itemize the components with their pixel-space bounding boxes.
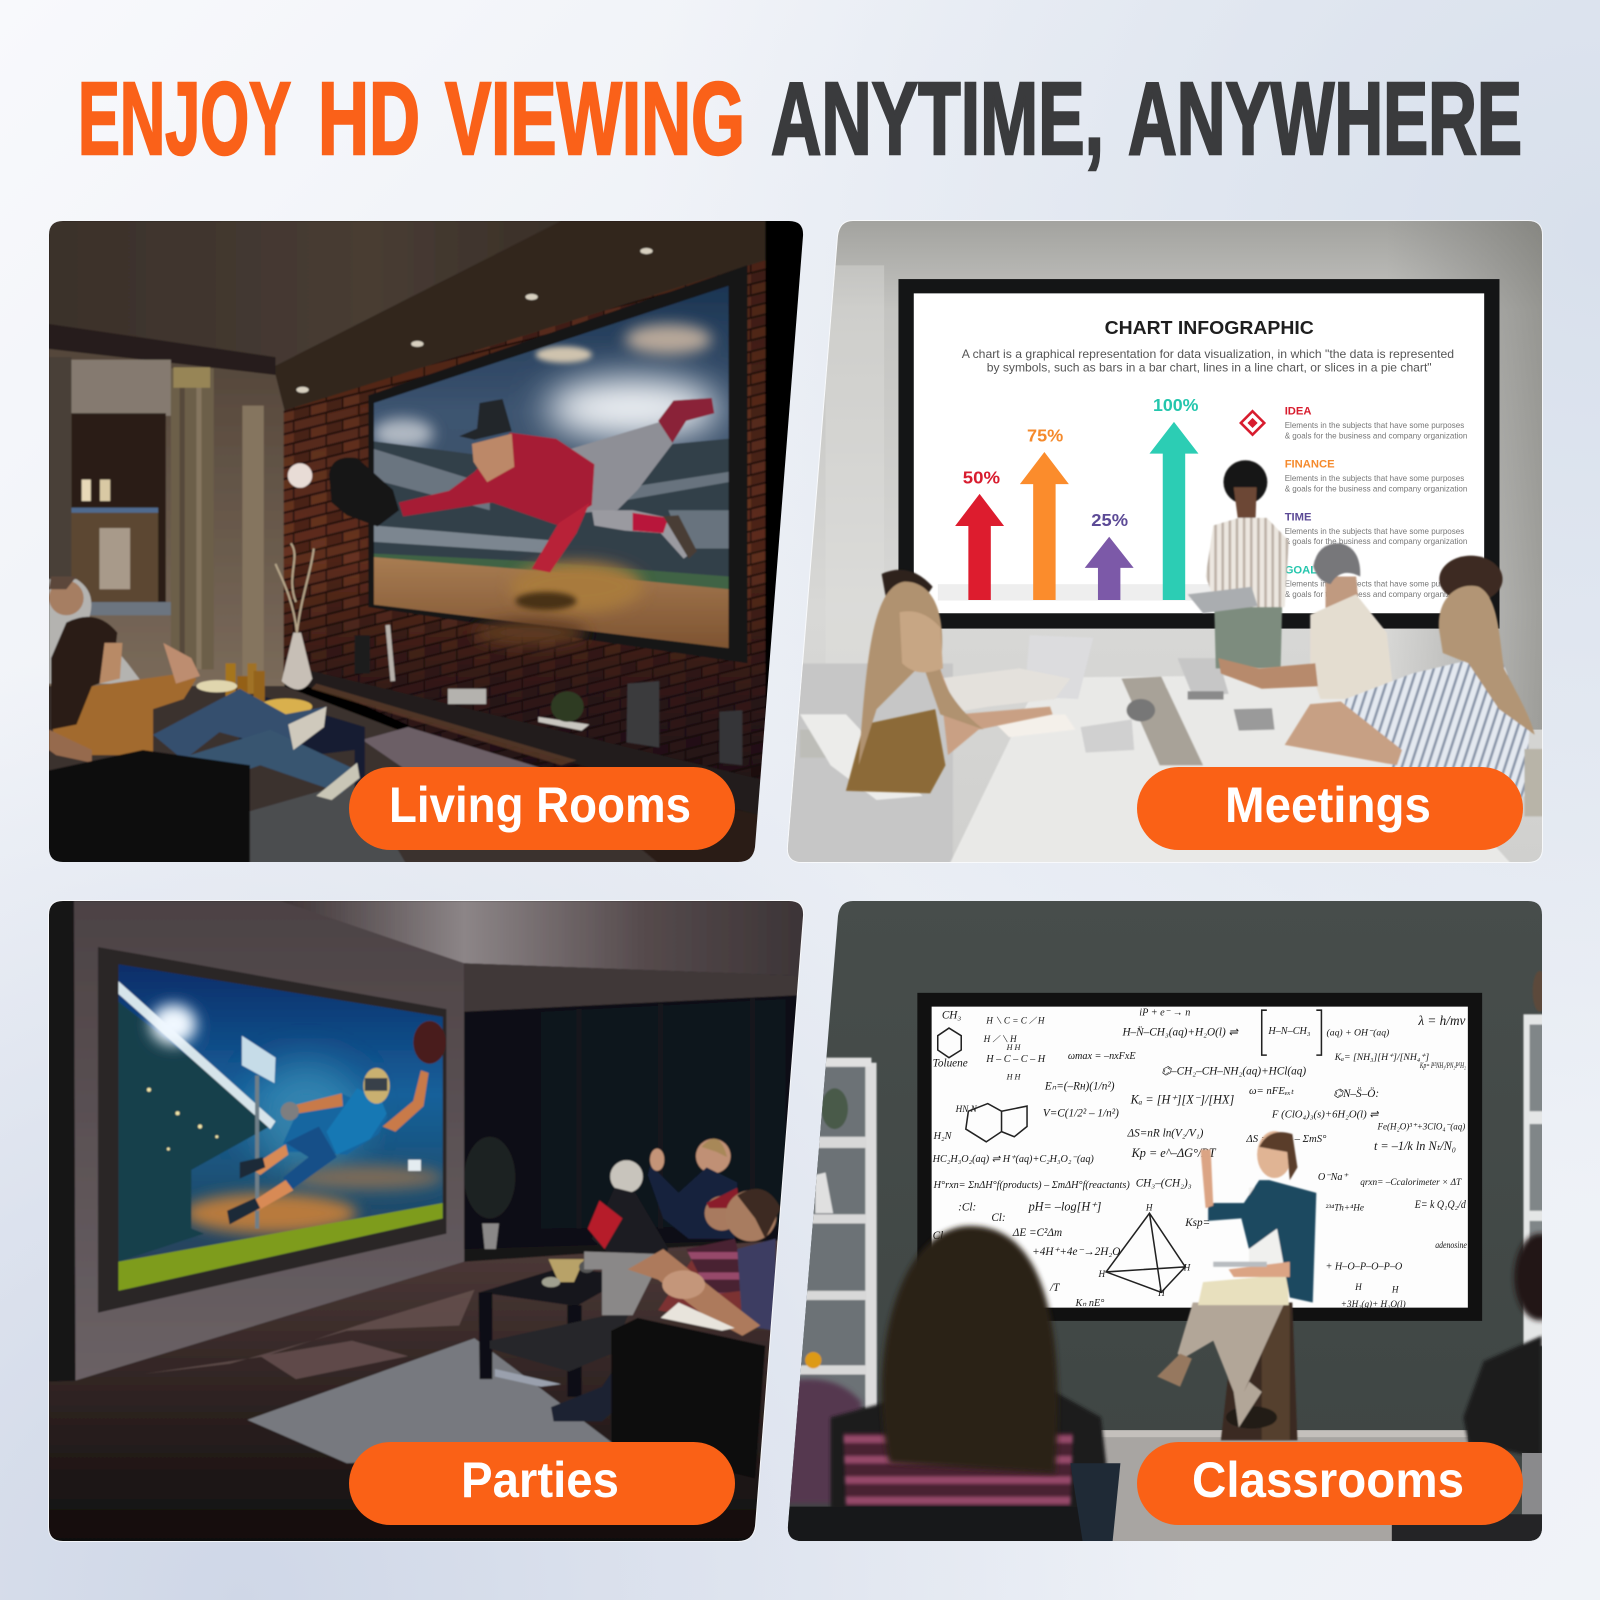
chart legend: & goals for the business and company organization [1285,483,1468,493]
chemistry formulas: H [1183,1262,1192,1272]
chemistry formulas: Toluene [933,1057,968,1069]
bookshelves [785,971,1547,1410]
chemistry formulas: Kₐ= [NH₃][H⁺]/[NH₄⁺] [1334,1052,1429,1063]
chart legend: Elements in the subjects that have some purposes [1285,473,1465,483]
title: VIEWING [445,61,745,176]
chemistry formulas: E= k Q₁Q₂/d [1414,1199,1466,1211]
chart legend: IDEA [1285,405,1312,417]
attendee: left woman [846,570,1070,793]
chemistry formulas: λ = h/mv [1417,1013,1466,1028]
projection screen [98,947,446,1313]
chemistry formulas: CH₃ [942,1009,961,1021]
chart legend: & goals for the business and company organization [1285,430,1468,440]
title [78,61,1522,176]
presentation screen [898,279,1499,629]
chart legend: TIME [1285,511,1312,523]
chemistry formulas: ⌬–CH₂–CH–NH₂(aq)+HCl(aq) [1161,1065,1306,1077]
screen frame and whiteboard [917,993,1482,1321]
chemistry formulas: Cl: [991,1212,1006,1224]
chemistry formulas: H [1157,1288,1166,1298]
chemistry formulas: HC₂H₃O₂(aq) ⇌ H⁺(aq)+C₂H₃O₂⁻(aq) [932,1154,1094,1165]
chemistry formulas: ΔE =C²Δm [1012,1227,1062,1239]
teacher on stool [1157,1131,1316,1440]
chemistry formulas: H°rxn= ΣnΔH°f(products) – ΣmΔH°f(reactants) [933,1180,1130,1191]
wood floor and rug [49,1239,806,1545]
chemistry formulas: Eₙ=(–Rн)(1/n²) [1044,1080,1115,1092]
chemistry formulas: H [1354,1282,1363,1292]
chemistry formulas: H–N–CH₃ [1267,1026,1311,1037]
title: HD [318,61,420,176]
chemistry formulas: Fe(H₂O)³⁺+3ClO₄⁻(aq) [1377,1122,1465,1133]
sofa [49,750,250,867]
chemistry formulas: Cl [933,1230,943,1242]
coffee table [479,1259,633,1397]
recessed lights [296,248,653,393]
chart legend: Elements in the subjects that have some purposes [1285,420,1465,430]
label: Living Rooms: Living Rooms [389,777,691,833]
football player [227,1021,446,1224]
chemistry formulas: ΔS=nR ln(V₂/V₁) [1127,1128,1204,1140]
chemistry formulas: + H–O–P–O–P–O [1326,1261,1403,1272]
audience [785,1226,1565,1545]
vase with branches [276,543,314,689]
chart legend [1285,405,1468,599]
chemistry formulas: H–N̈–CH₃(aq)+H₂O(l) ⇌ [1121,1027,1239,1039]
chemistry formulas: iP + e⁻ → n [1139,1007,1190,1018]
chemistry formulas: pH= –log[H⁺] [1028,1200,1102,1214]
chemistry formulas: Kp= P²NH₃/PN₂P³H₂ [1419,1060,1466,1070]
label: Classrooms [1137,1442,1523,1525]
chart legend: & goals for the business and company organization [1285,536,1468,546]
panel: meetings [785,219,1550,867]
brick wall [284,260,765,862]
panel: living rooms [46,219,811,867]
chart legend: & goals for the business and company organization [1285,589,1468,599]
dust cloud [474,561,643,645]
title: ANYTIME, [771,61,1104,176]
chemistry formulas: :Cl: [958,1202,976,1214]
chemistry formulas: Kp = e^–ΔG°/RT [1131,1146,1217,1160]
chemistry formulas: t = –1/k ln Nₜ/N₀ [1374,1139,1456,1153]
sofa [611,1318,765,1479]
meeting table [785,629,1535,867]
panel: classrooms [785,897,1565,1545]
chemistry formulas: Kₐ = [H⁺][X⁻]/[HX] [1130,1093,1234,1107]
chemistry formulas: H [1097,1269,1106,1279]
label: Meetings: Meetings [1225,777,1431,833]
chemistry formulas: H ⟋ ⟍ H [983,1034,1018,1044]
chemistry formulas: ω= nFEₑₓₜ [1249,1085,1295,1097]
chart legend: Elements in the subjects that have some purposes [1285,526,1465,536]
chemistry formulas [932,1007,1467,1309]
chart legend: Elements in the subjects that have some purposes [1285,579,1465,589]
chemistry formulas: H [1145,1203,1154,1213]
chemistry formulas: H [1391,1284,1400,1294]
chemistry formulas: Kₙ nE° [1075,1298,1104,1309]
arrow: 75%: 75% [1027,425,1063,445]
chemistry formulas: F (ClO₄)₃(s)+6H₂O(l) ⇌ [1271,1108,1379,1120]
label: Parties: Parties [461,1452,619,1508]
label: Parties [349,1442,735,1525]
chemistry formulas: qrxn= –Ccalorimeter × ΔT [1360,1177,1462,1188]
chemistry formulas: ⌬N–S̈–Ö: [1333,1088,1379,1100]
label: Meetings [1137,767,1523,850]
chemistry formulas: Ksp= [1184,1217,1210,1229]
viewers on sofa [49,577,360,800]
chemistry formulas: +3H₂(g)+ H₂O(l) [1341,1299,1406,1309]
chemistry formulas: H H [1006,1043,1022,1052]
chemistry formulas: /T [1049,1282,1060,1294]
chart description: by symbols, such as bars in a bar chart, lines in a line chart, or slices in a pie chart" [987,361,1432,374]
chemistry formulas: (aq) + OH⁻(aq) [1327,1028,1389,1039]
chemistry formulas: H₂N [933,1131,953,1142]
label: Classrooms: Classrooms [1192,1452,1464,1508]
arrow: 50%: 50% [963,468,1000,488]
projection screen [368,265,747,663]
attendee: right women [1285,556,1545,816]
attendee: grey-haired man [1188,543,1394,699]
arrow: 25% [1085,510,1134,600]
panel: parties [46,897,811,1545]
chemistry formulas: ²³⁴Th+⁴He [1326,1203,1364,1213]
chemistry formulas: H H [1006,1073,1022,1082]
table, bottles and snacks [196,663,365,801]
floor and shelf [49,625,765,867]
fans on sofa [551,1139,781,1421]
window and curtains [49,357,264,681]
chemistry formulas: +4H⁺+4e⁻→2H₂O [1032,1246,1120,1258]
chart title: CHART INFOGRAPHIC [1105,317,1314,338]
chart description [962,348,1454,374]
chemistry formulas: CH₃–(CH₂)₃ [1136,1178,1192,1190]
chemistry formulas: ΔS = ΣnS° – ΣmS° [1245,1133,1327,1145]
icon: diamond [1241,411,1264,435]
chemistry formulas: adenosine [1435,1240,1467,1250]
presenter [1188,460,1289,668]
label: Living Rooms [349,767,735,850]
chemistry formulas: V=C(1/2² – 1/n²) [1043,1107,1119,1119]
chart description: A chart is a graphical representation for data visualization, in which "the data is represented [962,348,1454,361]
chemistry formulas: HN N [955,1104,978,1114]
arrow: 100%: 100% [1153,395,1199,415]
baseball player [288,398,714,572]
chemistry formulas: ωmax = –nxFxE [1068,1051,1136,1062]
arrow: 75% [1020,425,1069,600]
arrow: 100% [1149,395,1199,600]
night windows [464,995,806,1249]
title: ENJOY [78,61,291,176]
chemistry formulas: O⁻Na⁺ [1318,1172,1349,1183]
chart legend: FINANCE [1285,458,1335,470]
chemistry formulas: H – C – C – H [985,1054,1046,1065]
arrow: 50% [955,468,1004,600]
chemistry formulas: H ⟍ C = C ⟋ H [985,1015,1046,1025]
chart legend: GOAL [1285,564,1317,576]
arrow: 25%: 25% [1091,510,1128,530]
